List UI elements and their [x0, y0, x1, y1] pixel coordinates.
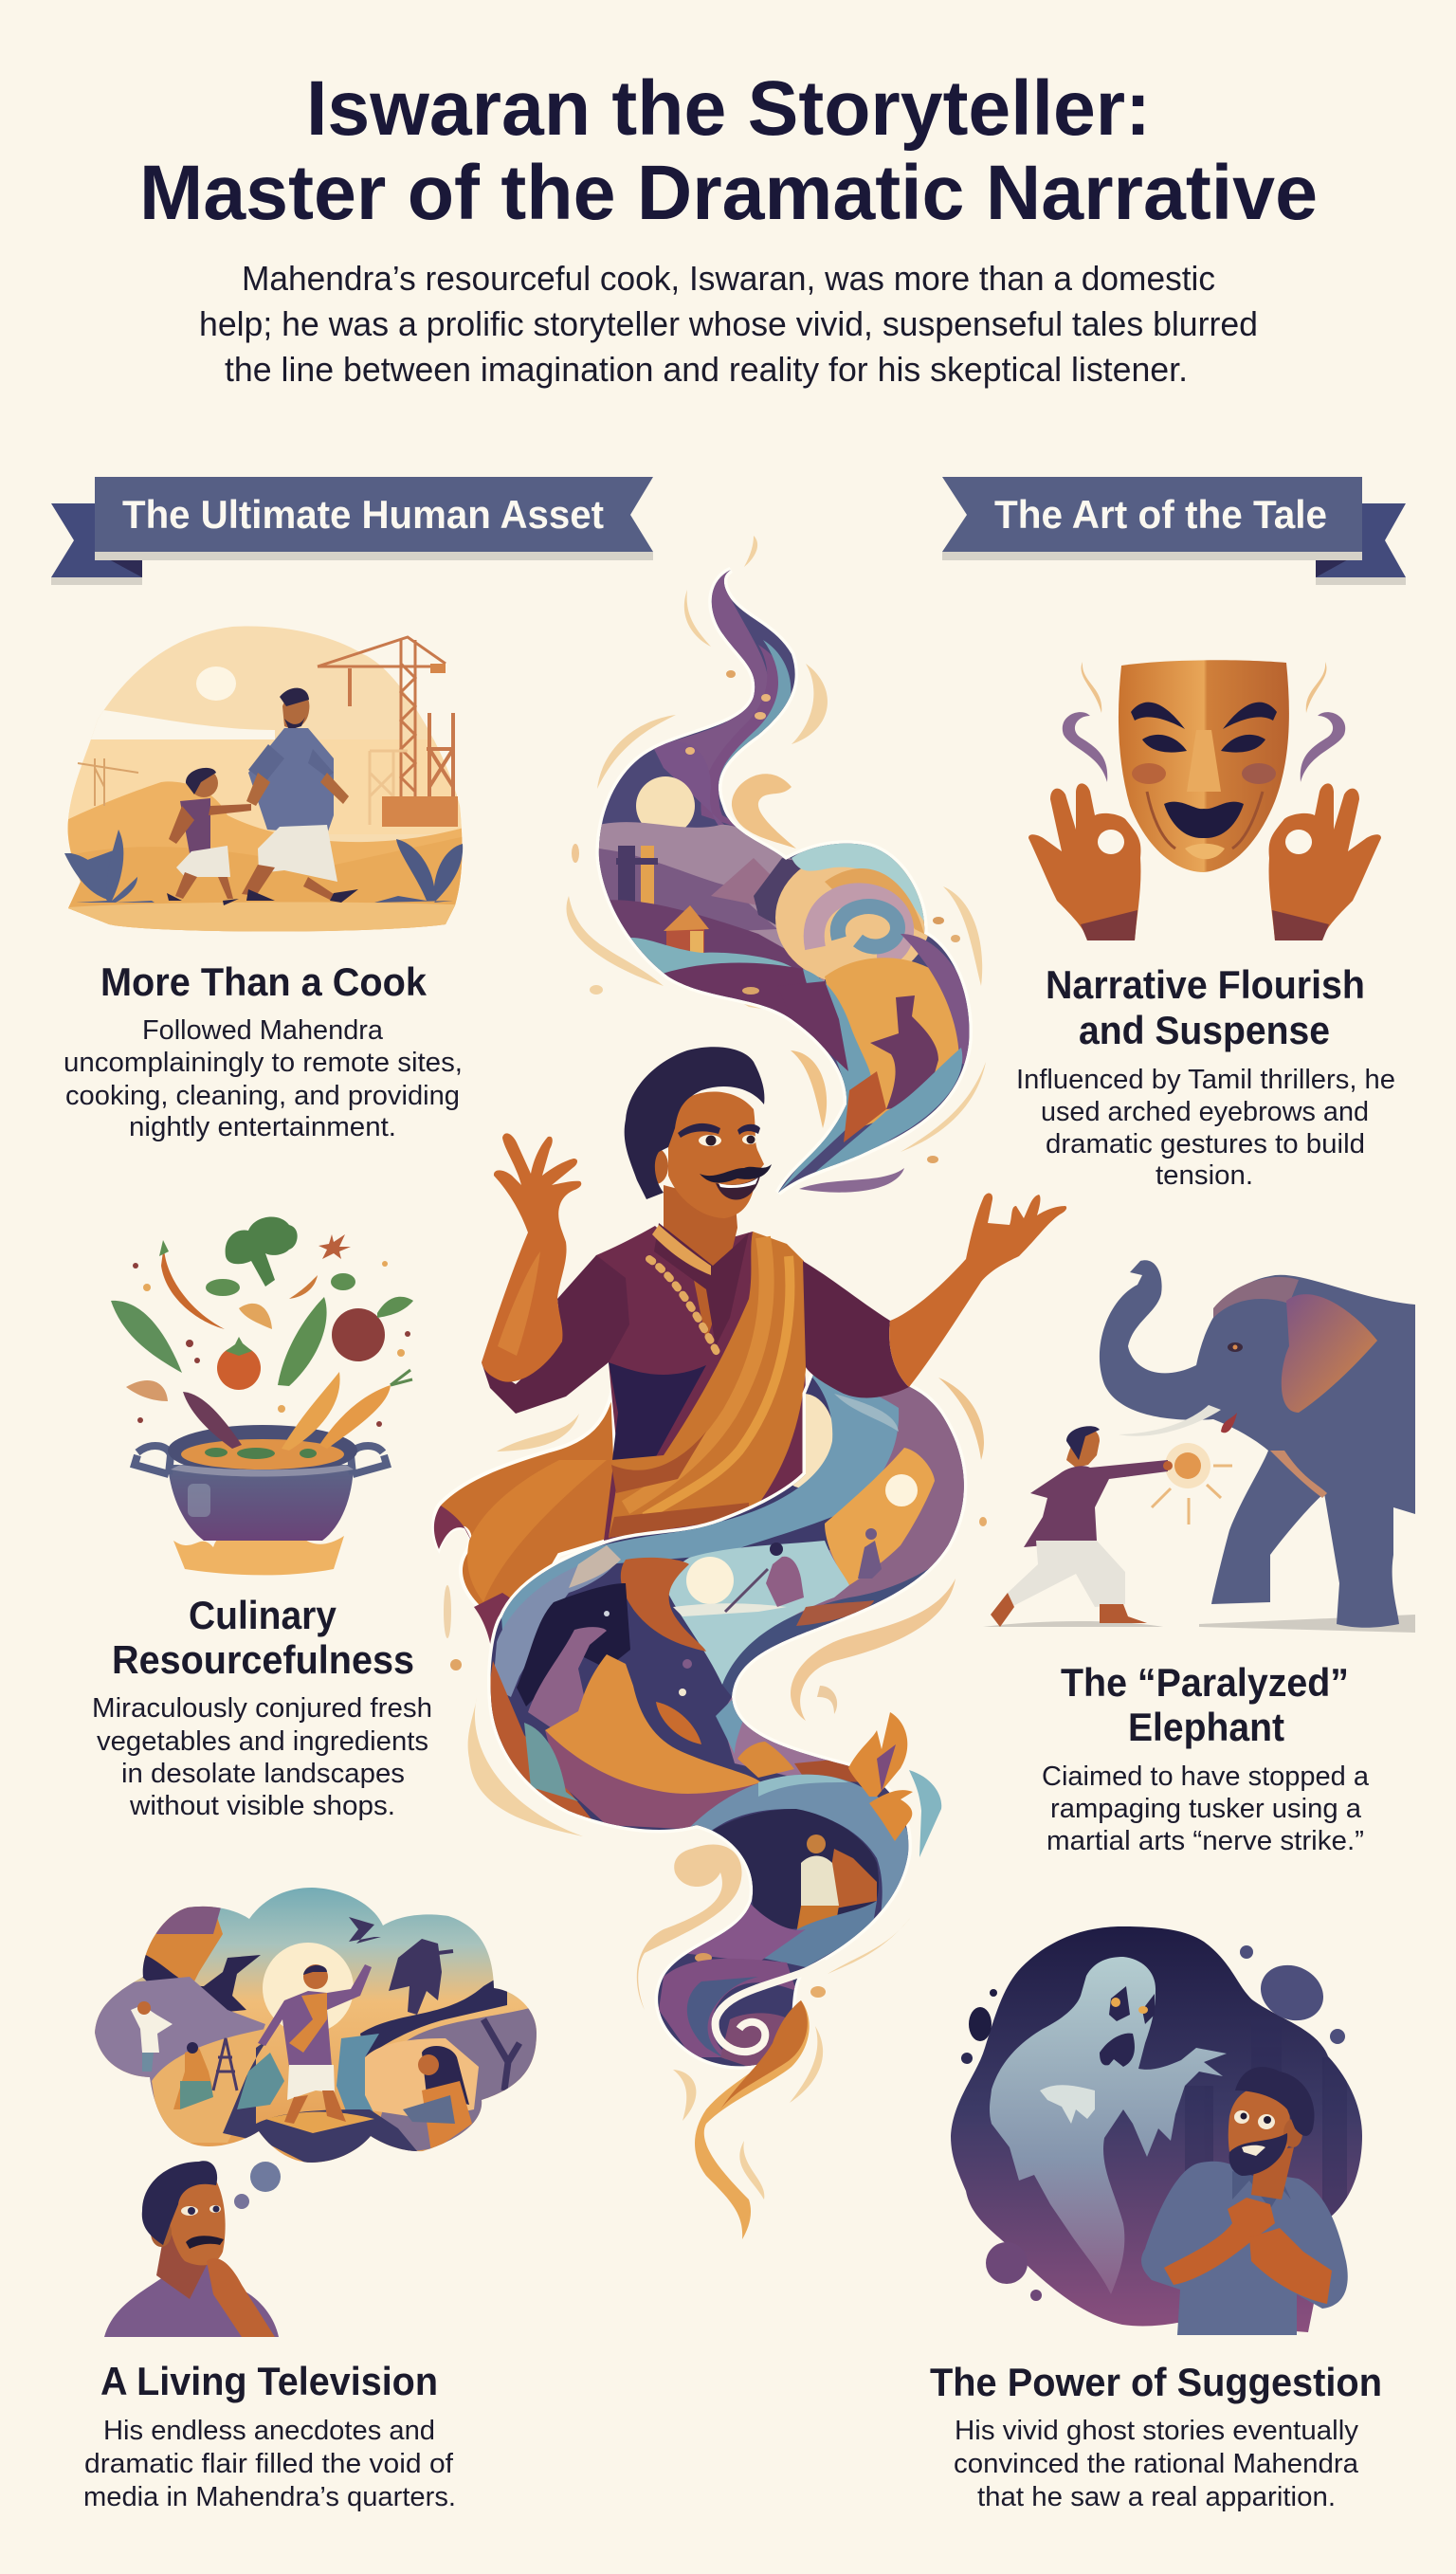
- panel: Narrative Flourish and Suspense: [1016, 660, 1395, 1191]
- left arm and hand: [482, 1133, 581, 1382]
- orange reclining figure: [545, 1654, 760, 1794]
- body text: convinced the rational Mahendra: [954, 2449, 1359, 2479]
- intro paragraph: help; he was a prolific storyteller whose vivid, suspenseful tales blurred: [199, 304, 1258, 343]
- boy walking: [167, 768, 251, 905]
- right lobe: [379, 2005, 540, 2152]
- body text: tension.: [1156, 1160, 1253, 1191]
- body text: in desolate landscapes: [121, 1759, 405, 1789]
- impact burst: [1152, 1443, 1232, 1524]
- body text: dramatic flair filled the void of: [84, 2449, 454, 2479]
- body text: that he saw a real apparition.: [977, 2482, 1336, 2512]
- illustration: mask and hands: [1028, 660, 1381, 940]
- body text: nightly entertainment.: [129, 1112, 396, 1142]
- dark cave: [517, 1583, 630, 1707]
- illustration: elephant and martial artist: [983, 1260, 1415, 1633]
- swirl spiral gap: [716, 1962, 827, 2052]
- purple reclining figure: [528, 1627, 607, 1727]
- banner: The Ultimate Human Asset: The Ultimate Human Asset: [122, 492, 604, 537]
- body text: vegetables and ingredients: [97, 1726, 428, 1757]
- body text: used arched eyebrows and: [1041, 1097, 1369, 1127]
- illustration: listening man: [104, 2161, 281, 2337]
- left sleeve: [482, 1255, 629, 1414]
- right bridge: [360, 1972, 507, 2057]
- woman: [422, 2046, 469, 2105]
- body text: martial arts “nerve strike.”: [1046, 1826, 1364, 1856]
- swirl flourishes, lower: [444, 1378, 987, 2200]
- navy star field dots: [679, 1689, 686, 1696]
- flame tips: [848, 1712, 941, 1857]
- heading: [112, 1593, 414, 1682]
- intro paragraph: Mahendra’s resourceful cook, Iswaran, was more than a domestic: [242, 259, 1215, 298]
- ghost: [990, 1957, 1227, 2294]
- body text: Miraculously conjured fresh: [92, 1693, 432, 1724]
- heading: Elephant: [1128, 1705, 1284, 1749]
- neck: [664, 1185, 737, 1342]
- martial artist: [991, 1426, 1173, 1627]
- bird: [349, 1917, 381, 1944]
- title: Master of the Dramatic Narrative: [139, 150, 1318, 236]
- body text: without visible shops.: [129, 1791, 395, 1821]
- heading: [1061, 1660, 1349, 1749]
- body text: [1016, 1065, 1395, 1191]
- elephant: [1100, 1260, 1415, 1628]
- right purple arc: [732, 1386, 964, 1705]
- panel: More Than a Cook: [57, 621, 474, 1142]
- purple wisp at the mouth: [799, 1168, 904, 1193]
- cream moon: [792, 1394, 832, 1488]
- head: [625, 1047, 772, 1218]
- body text: [92, 1693, 432, 1821]
- swirl cloud: [775, 863, 928, 980]
- hunter: [389, 1939, 442, 2015]
- left purple lobe: [90, 1977, 265, 2138]
- panel: The Paralyzed Elephant: [983, 1260, 1415, 1856]
- teal sky: [667, 1541, 849, 1685]
- body text: uncomplainingly to remote sites,: [64, 1048, 463, 1078]
- navy wave: [722, 1568, 930, 1697]
- illustration: thought cloud of tales: [90, 1882, 545, 2166]
- panel: Culinary Resourcefulness: [92, 1216, 432, 1821]
- body text: dramatic gestures to build: [1046, 1129, 1365, 1159]
- panel: A Living Television: [83, 1882, 545, 2512]
- right hand: [1269, 783, 1381, 940]
- mid blue band: [690, 1775, 908, 1911]
- upper story smoke: [588, 559, 986, 1204]
- lower scene: [706, 1809, 879, 1934]
- frightened man: [1141, 2067, 1348, 2335]
- heading: More Than a Cook: [100, 959, 428, 1004]
- navy base: [223, 2044, 417, 2163]
- body text: [1042, 1762, 1370, 1856]
- silhouette: [870, 995, 938, 1109]
- gesture swirls: [1063, 712, 1107, 782]
- body text: rampaging tusker using a: [1050, 1794, 1362, 1824]
- banner: The Art of the Tale: The Art of the Tale: [994, 492, 1327, 537]
- kurta torso: [569, 1226, 808, 1541]
- right sleeve: [803, 1261, 909, 1397]
- body text: His endless anecdotes and: [103, 2416, 435, 2446]
- illustration: pot with flying vegetables: [111, 1216, 413, 1575]
- orange smoke tail: [695, 2000, 810, 2239]
- left hand: [1028, 783, 1140, 940]
- banner: The Ultimate Human Asset: [51, 477, 653, 585]
- blob background: [951, 1926, 1362, 2332]
- body text: Followed Mahendra: [142, 1015, 384, 1046]
- body text: cooking, cleaning, and providing: [65, 1081, 460, 1111]
- man walking: [242, 688, 358, 903]
- blue-grey left: [493, 1555, 617, 1697]
- intro paragraph: [199, 259, 1258, 389]
- body text: Influenced by Tamil thrillers, he: [1016, 1065, 1395, 1095]
- body text: [64, 1015, 463, 1142]
- banner: The Art of the Tale: [942, 477, 1406, 585]
- smoke flourishes, upper: [567, 536, 986, 1163]
- heading: Resourcefulness: [112, 1637, 414, 1682]
- body text: His vivid ghost stories eventually: [955, 2416, 1358, 2446]
- foreground wave: [815, 1048, 963, 1172]
- title: Iswaran the Storyteller:: [306, 65, 1151, 152]
- body text: [83, 2416, 456, 2512]
- tusk: [1119, 1405, 1221, 1436]
- title: [139, 65, 1318, 236]
- center man: [258, 1964, 372, 2067]
- right arm and hand: [889, 1193, 1066, 1387]
- illustration: ghost and frightened man: [951, 1926, 1362, 2335]
- floating dots: [961, 1945, 1345, 2301]
- intro paragraph: the line between imagination and reality for his skeptical listener.: [225, 350, 1188, 389]
- panel: central storyteller illustration: [433, 536, 1066, 2239]
- torso shadow: [609, 1362, 706, 1460]
- heading: A Living Television: [100, 2359, 438, 2403]
- panel: The Power of Suggestion: [930, 1926, 1382, 2512]
- top-left scene: [144, 1906, 223, 1981]
- heading: Culinary: [189, 1593, 337, 1637]
- lower story swirl: [483, 1365, 976, 2076]
- scarf over shoulder: [609, 1232, 807, 1538]
- heading: and Suspense: [1079, 1008, 1330, 1052]
- collar: [654, 1223, 749, 1346]
- heading: The “Paralyzed”: [1061, 1660, 1349, 1705]
- body text: media in Mahendra’s quarters.: [83, 2482, 456, 2512]
- orange brown stream: [621, 1558, 706, 1652]
- left orange rim: [491, 1661, 592, 1818]
- heading: Narrative Flourish: [1046, 962, 1365, 1007]
- body text: Ciaimed to have stopped a: [1042, 1762, 1370, 1792]
- orange scene field: [825, 958, 962, 1128]
- heading: [1046, 962, 1365, 1052]
- heading: The Power of Suggestion: [930, 2360, 1382, 2404]
- illustration: walking on construction site: [57, 621, 474, 939]
- embroidery: [649, 1259, 719, 1356]
- body text: [954, 2416, 1359, 2512]
- trailing scarf end: [433, 1388, 616, 1669]
